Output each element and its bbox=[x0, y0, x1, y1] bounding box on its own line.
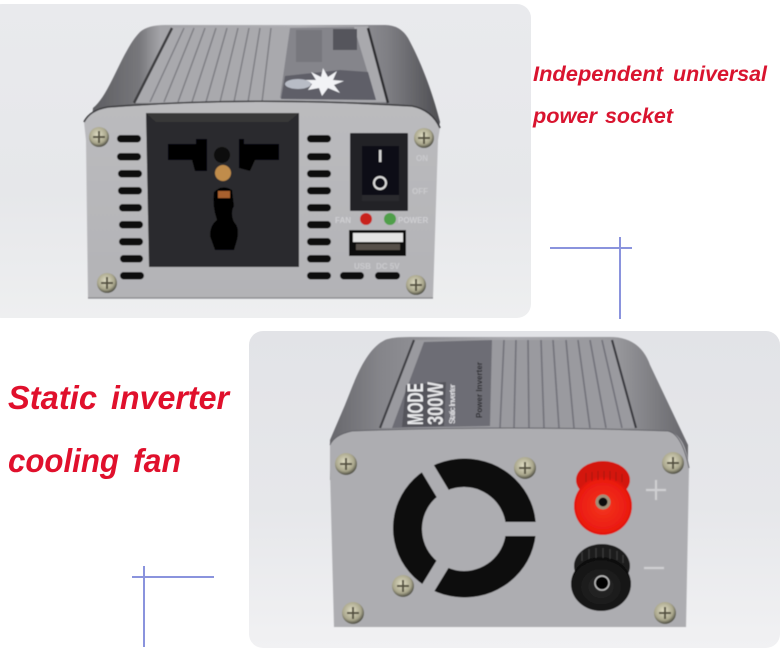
heading: Independent universal power socket: Independent bbox=[533, 63, 664, 86]
inverter top housing bbox=[90, 25, 440, 140]
vent slots bbox=[117, 135, 400, 280]
panel markings: OFF bbox=[412, 187, 428, 196]
heading: Static inverter cooling fan: cooling bbox=[8, 442, 119, 479]
red positive terminal bbox=[574, 461, 632, 535]
rear screws bbox=[335, 452, 684, 624]
black negative terminal bbox=[571, 544, 631, 611]
polarity marks bbox=[644, 480, 666, 568]
LED indicators bbox=[335, 213, 428, 225]
USB port bbox=[349, 230, 406, 256]
heading: Independent universal power socket: power bbox=[532, 105, 599, 128]
callout marker: top right bbox=[550, 237, 632, 319]
rear label sticker: Power Inverter bbox=[475, 362, 484, 418]
screws bbox=[89, 127, 434, 295]
label sticker with starburst bbox=[280, 27, 376, 100]
heading: Independent universal power socket bbox=[532, 63, 768, 128]
panel: universal power socket photo bbox=[0, 4, 531, 318]
heading: Static inverter cooling fan: fan bbox=[133, 442, 181, 479]
inverter front face bbox=[84, 101, 440, 298]
rear label sticker bbox=[392, 340, 492, 428]
panel markings: DC 5V bbox=[376, 262, 400, 271]
heading: Independent universal power socket: universal bbox=[673, 63, 768, 86]
rear face bbox=[330, 428, 689, 627]
heading: Static inverter cooling fan: Static bbox=[8, 379, 97, 416]
heading: Static inverter cooling fan bbox=[8, 379, 231, 479]
heading: Static inverter cooling fan: inverter bbox=[111, 379, 231, 416]
rocker switch bbox=[350, 133, 408, 211]
rear label sticker: MODE bbox=[403, 383, 428, 425]
rear top housing bbox=[330, 337, 688, 480]
universal socket bbox=[146, 113, 299, 267]
fan opening bbox=[393, 458, 540, 598]
panel markings: ON bbox=[416, 154, 428, 163]
callout marker: bottom left bbox=[132, 566, 214, 647]
heading: Independent universal power socket: socket bbox=[605, 105, 674, 128]
LED indicators: FAN bbox=[335, 216, 351, 225]
rear label sticker: 300W bbox=[423, 382, 448, 425]
rear label sticker: Static Inverter bbox=[448, 384, 457, 424]
panel: cooling fan photo bbox=[249, 331, 780, 648]
panel markings bbox=[354, 154, 428, 271]
LED indicators: POWER bbox=[398, 216, 428, 225]
panel markings: USB bbox=[354, 262, 371, 271]
